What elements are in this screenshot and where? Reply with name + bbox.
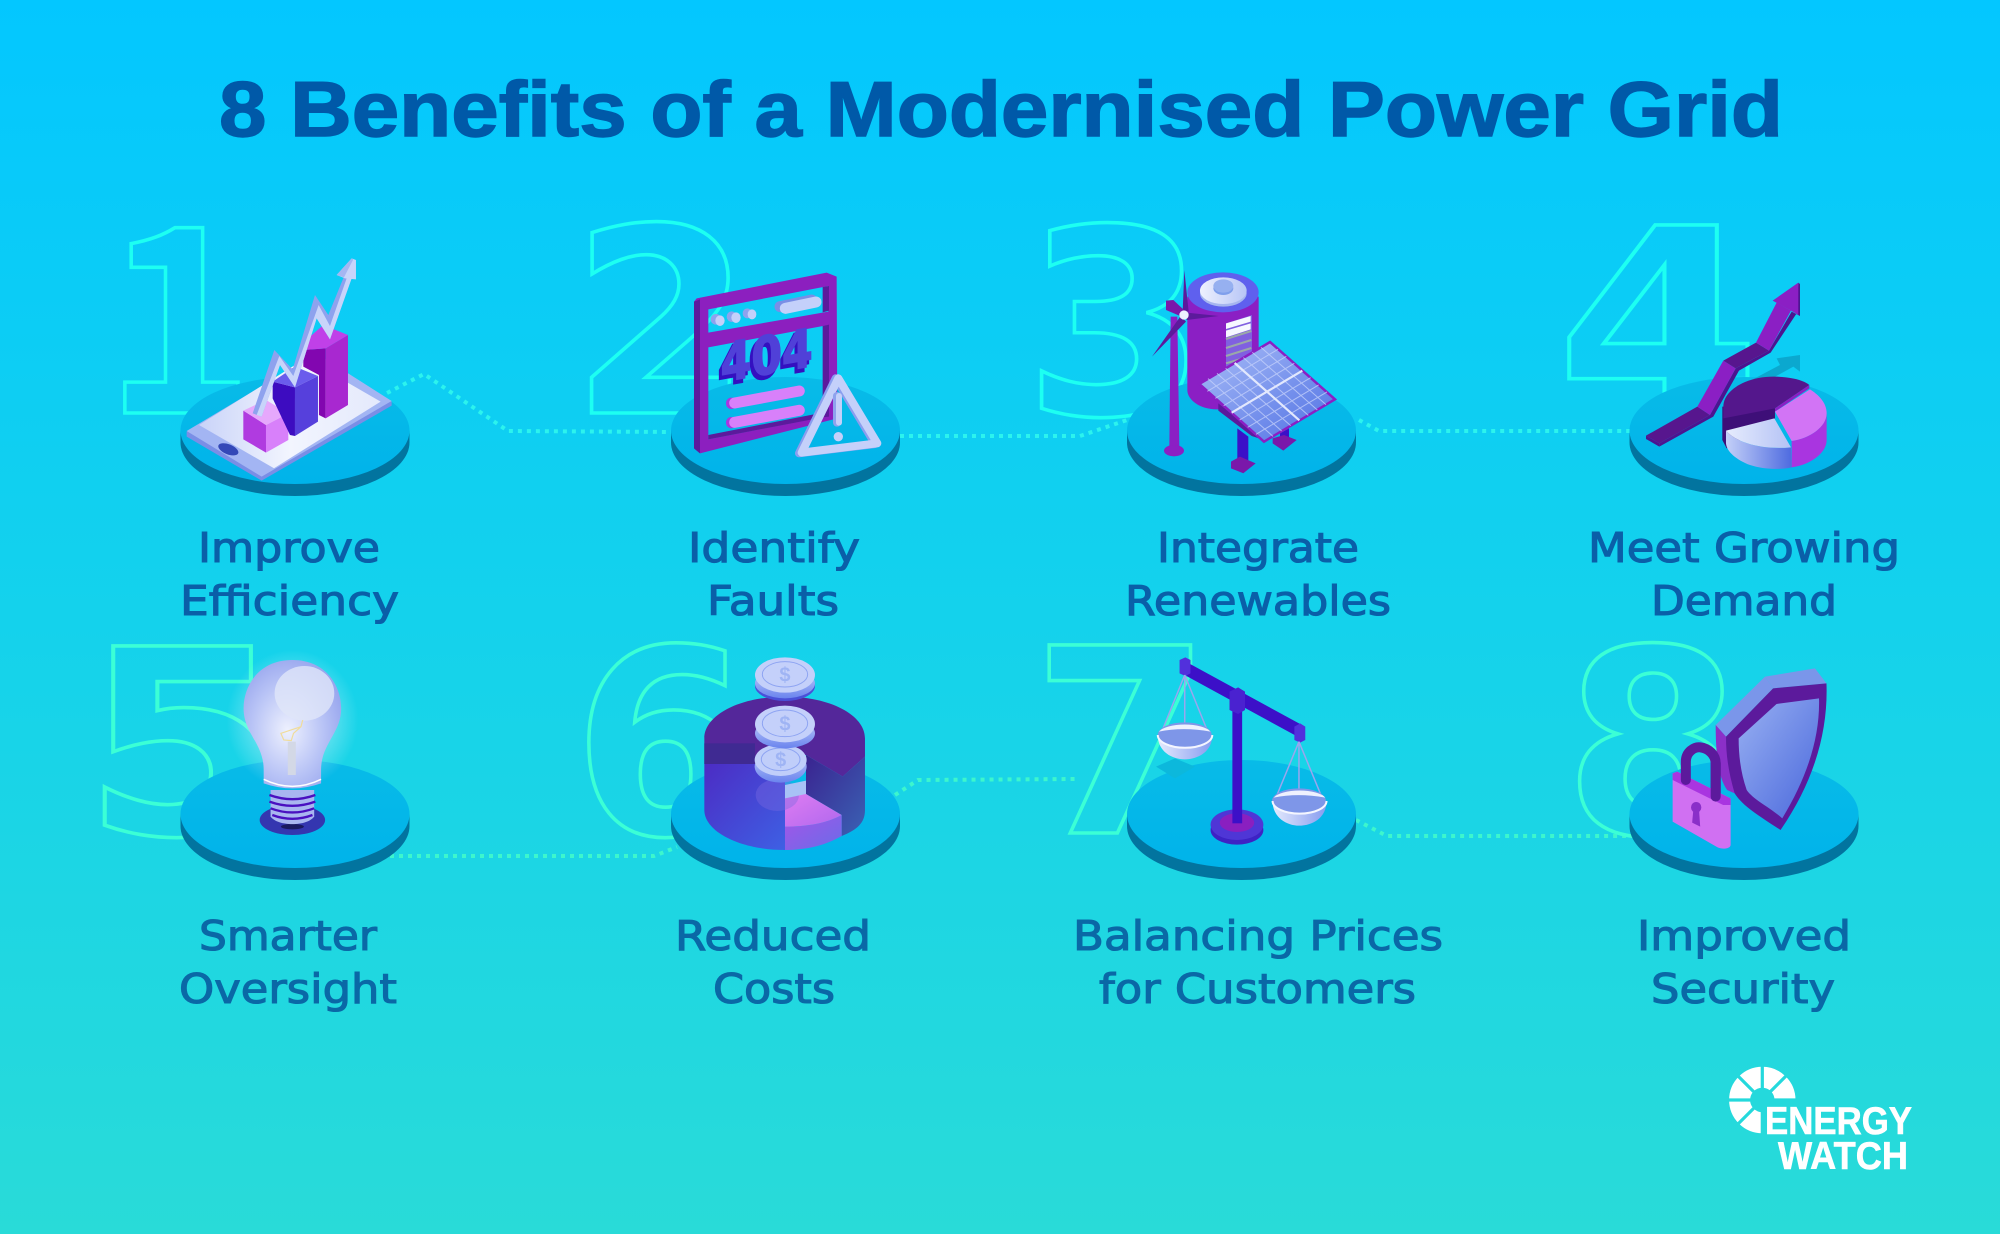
disc 1 [180,377,410,496]
icon: coin stack [755,657,815,783]
label: Reduced Costs [675,912,871,1013]
panel: improved security [1564,595,1858,1013]
label: Improved Security [1637,912,1851,1013]
icon: coin stack: $ [779,714,791,736]
label: Meet Growing Demand: Demand [1651,577,1837,625]
icon: warning triangle [799,378,877,453]
label: Meet Growing Demand [1588,524,1900,625]
label: Balancing Prices for Customers [1073,912,1443,1013]
panel: smarter oversight [82,595,410,1013]
label: Identify Faults [688,524,860,625]
disc 5 [180,760,410,880]
disc 2 [671,377,900,496]
panel: meet growing demand [1556,174,1900,625]
number 3: 3 [1024,175,1207,475]
logo mark [1729,1066,1796,1134]
logo text: WATCH [1778,1135,1908,1178]
icon: coin stack: $ [779,665,791,687]
icon: light bulb [226,650,358,835]
number 5: 5 [82,595,287,895]
icon: solar panel [1199,342,1335,442]
disc 8 [1630,760,1858,880]
panel: improve efficiency [104,116,410,625]
icon: left pan [1158,675,1212,759]
icon: 404 error window [694,273,877,453]
icon: coin stack: $ [775,750,786,772]
label: Balancing Prices for Customers: Balancing Prices [1073,912,1443,960]
number 7: 7 [1032,594,1211,894]
icon: rising arrow [1646,283,1800,447]
logo text [1765,1100,1912,1178]
solar panel stand [1218,403,1297,473]
disc 6 [671,760,900,880]
logo: Energy Watch [1729,1066,1912,1170]
number 6: 6 [573,595,751,895]
logo text: ENERGY [1765,1100,1912,1143]
icon: wind turbine [1152,270,1219,456]
icon: phone with bar chart [187,258,392,481]
icon: pie chart [1722,377,1827,469]
panel: reduced costs [573,595,900,1013]
label: Reduced Costs: Costs [713,965,835,1013]
dotted connectors between benefits [387,374,1630,856]
label: Smarter Oversight [179,912,397,1013]
icon: shield and padlock [1673,668,1827,849]
panel: integrate renewables [1024,175,1391,625]
label: Improve Efficiency [180,524,399,625]
number 4: 4 [1556,174,1761,474]
icon: 404 error window: 404 [721,317,813,395]
label: Improve Efficiency: Efficiency [180,577,399,625]
label: Integrate Renewables: Integrate [1157,524,1359,572]
icon: rising arrow and pie chart [1646,283,1827,469]
number 2: 2 [571,174,752,474]
icon: padlock [1673,747,1731,849]
disc 7 [1127,760,1356,880]
icon: coins on cylinder chart [704,657,865,850]
icon: rising arrow [253,258,356,417]
title: 8 Benefits of a Modernised Power Grid [219,65,1783,153]
label: Reduced Costs: Reduced [675,912,871,960]
panel: identify faults [571,174,900,625]
label: Smarter Oversight: Smarter [199,912,377,960]
disc 3 [1127,377,1356,496]
label: Improve Efficiency: Improve [198,524,380,572]
label: Meet Growing Demand: Meet Growing [1588,524,1900,572]
panel: balancing prices for customers [1032,594,1443,1013]
icon: balance scale [1156,657,1327,845]
label: Identify Faults: Faults [707,577,839,625]
icon: battery, wind turbine and solar panel [1152,270,1335,473]
number 8: 8 [1564,595,1742,895]
label: Balancing Prices for Customers: for Customers [1099,965,1416,1013]
label: Improved Security: Improved [1637,912,1851,960]
number 1: 1 [104,116,254,488]
label: Identify Faults: Identify [688,524,860,572]
label: Integrate Renewables: Renewables [1125,577,1391,625]
label: Integrate Renewables [1125,524,1391,625]
label: Improved Security: Security [1651,965,1835,1013]
icon: 404 error window: 404 [718,321,810,399]
icon: right pan [1272,742,1327,826]
disc 4 [1630,377,1858,496]
label: Smarter Oversight: Oversight [179,965,397,1013]
